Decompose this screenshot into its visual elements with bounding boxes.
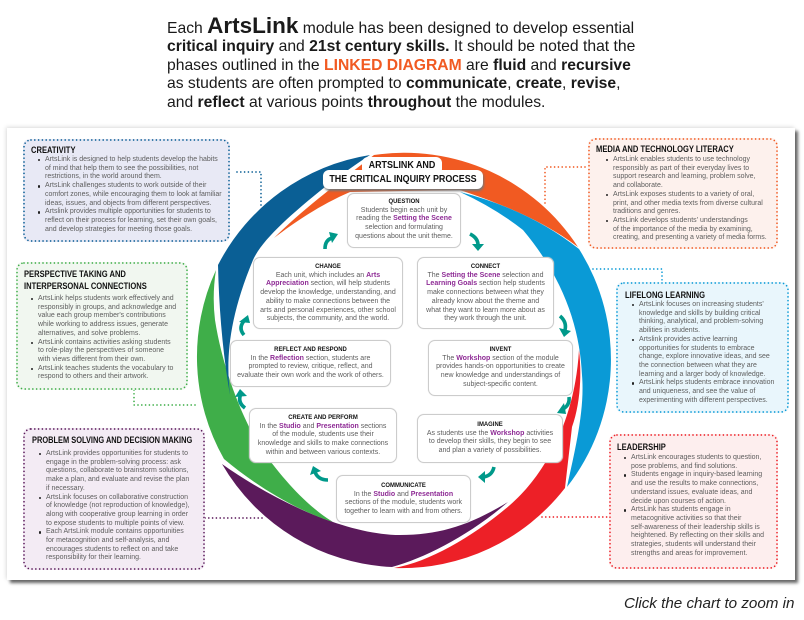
bullets: creativity: comfort zones, while encouraging them to look at familiar [45, 191, 222, 198]
bullets: perspective taking: ArtsLink contains activities asking students [38, 339, 171, 346]
bullets: leadership: self-awareness of their leadership skills is [631, 524, 760, 531]
bullets: perspective taking: to role-play the perspectives of someone [38, 347, 164, 354]
bullets: creativity: ArtsLink challenges students to work outside of their [45, 182, 206, 189]
step: invent: The Workshop section of the module [442, 355, 559, 362]
step: change: Each unit, which includes an Arts [276, 272, 380, 279]
step: question: Students begin each unit by [361, 207, 447, 214]
arrow: imagine to communicate [478, 467, 494, 483]
bullets: media literacy: ArtsLink enables students to use technology [613, 156, 750, 163]
panel: leadership [609, 434, 778, 569]
bullets: lifelong learning: abilities in students. [639, 327, 700, 334]
bullets: creativity: Artslink provides multiple opportunities for students to [45, 208, 211, 215]
bullets: leadership: Students engage in inquiry-based learning [631, 471, 762, 478]
step: question [347, 193, 461, 248]
heading: perspective taking: PERSPECTIVE TAKING AND [24, 269, 126, 280]
bullets: lifelong learning: experimenting with different perspectives. [639, 397, 768, 404]
title line one: ARTSLINK AND [369, 160, 435, 171]
bullets: creativity: and develop strategies for meeting those goals. [45, 226, 192, 233]
step: change: subjects, the community, and the world. [267, 315, 389, 322]
bullets: leadership [624, 454, 764, 557]
step: connect [417, 257, 554, 329]
connector: creativity [237, 172, 261, 205]
step: imagine: to develop their skills, they begin to see [429, 438, 551, 445]
bullets: lifelong learning: opportunities for students to embrace [639, 345, 755, 352]
arrow: create to reflect [235, 389, 247, 408]
bullets: problem solving [39, 450, 190, 561]
heading: creativity: CREATIVITY [31, 145, 75, 156]
bullets: perspective taking [31, 294, 176, 380]
title line two: THE CRITICAL INQUIRY PROCESS [329, 174, 477, 185]
step: change: CHANGE [315, 263, 341, 270]
bullets: leadership: strategies, students will understand their [631, 541, 756, 548]
bullets: problem solving: if necessary. [46, 485, 85, 492]
arrow: invent to imagine [557, 397, 569, 414]
connector: lifelong learning [593, 269, 662, 282]
step: invent: INVENT [490, 346, 511, 353]
bullets: leadership: metacognitive activities so that their [631, 515, 742, 522]
bullets: leadership: ArtsLink has students engage in [631, 506, 731, 513]
step: change: Appreciation section, will help students [266, 280, 390, 287]
bullets: lifelong learning: ArtsLink focuses on increasing students' [639, 301, 764, 308]
panel: creativity [23, 139, 230, 242]
step: connect: what they want to learn more about as [426, 307, 545, 314]
ring segment: red [394, 350, 580, 568]
bullets: problem solving: ArtsLink provides opportunities for students to [46, 450, 188, 457]
bullets: creativity: ideas, issues, and objects from different perspectives. [45, 200, 211, 207]
bullets: leadership: and use the results to make connections, [631, 480, 758, 487]
connector: perspective taking [134, 390, 197, 405]
bullets: media literacy: print, and other media texts from diverse cultural [613, 200, 763, 207]
ring segment: light blue [460, 192, 611, 487]
step: connect: make connections between what they [427, 289, 544, 296]
bullets: problem solving: engage in the problem-solving process: ask [46, 459, 181, 466]
bullets: media literacy: ArtsLink exposes students to a variety of oral, [613, 191, 754, 198]
step: create and perform [249, 408, 397, 463]
bullets: lifelong learning: ArtsLink helps students embrace innovation [639, 379, 774, 386]
text: critical inquiry and 21st century skills. It should be noted that the [167, 38, 635, 55]
arrow: connect to invent [559, 316, 571, 337]
step: change: ability to make connections between the [266, 298, 390, 305]
caption: Click the chart to zoom in [624, 595, 795, 612]
bullets: leadership: understand issues, evaluate ideas, and [631, 489, 752, 496]
bullets: leadership: pose problems, and find solutions. [631, 463, 737, 470]
title line two [323, 170, 483, 189]
arrow: reflect to change [239, 315, 250, 335]
ring segment: orange [274, 153, 578, 247]
bullets: problem solving: ArtsLink focuses on collaborative construction [46, 494, 188, 501]
bullets: leadership: strengths and areas for improvement. [631, 550, 747, 557]
bullets: perspective taking: respond to others and their artwork. [38, 373, 149, 380]
bullets: media literacy: and collaborate. [613, 182, 663, 189]
bullets: lifelong learning: thinking, analytical, and problem-solving [639, 318, 763, 325]
bullets: creativity: reflect on their process for learning, set their own goals, [45, 217, 217, 224]
step: create and perform: of the module, students use their [272, 431, 374, 438]
bullets: media literacy: responsibly as part of their everyday lives to [613, 165, 749, 172]
step: create and perform: In the Studio and Presentation sections [260, 423, 386, 430]
bullets: creativity: of mind that help them to see the possibilities, not [45, 165, 198, 172]
step: connect: CONNECT [471, 263, 500, 270]
step: communicate: sections of the module, students work [345, 499, 462, 506]
text: phases outlined in the LINKED DIAGRAM are fluid and recursive [167, 57, 631, 74]
step: question: reading the Setting the Scene [356, 215, 452, 222]
step: create and perform: knowledge and skills to make connections [258, 440, 388, 447]
step: imagine: IMAGINE [477, 421, 503, 428]
step: reflect and respond: REFLECT AND RESPOND [274, 346, 347, 353]
text: as students are often prompted to communicate, create, revise, [167, 75, 620, 92]
step: connect: they work through the unit. [444, 315, 527, 322]
bullets: problem solving: Each ArtsLink module contains opportunities [46, 528, 184, 535]
bullets: lifelong learning: knowledge and skills by building critical [639, 310, 760, 317]
step: communicate [336, 475, 471, 523]
bullets: problem solving: encourages students to reflect on and take [46, 546, 178, 553]
intro text [167, 13, 635, 111]
step: reflect and respond: In the Reflection section, students are [251, 355, 370, 362]
panel: media and technology literacy [588, 138, 778, 249]
step: communicate: In the Studio and Presentation [354, 491, 453, 498]
bullets: problem solving: along with cooperative group learning in order [46, 511, 188, 518]
panel: problem solving and decision making [23, 428, 205, 570]
heading: media literacy: MEDIA AND TECHNOLOGY LITERACY [596, 144, 734, 155]
bullets: problem solving: of knowledge (not reproduction of knowledge), [46, 502, 190, 509]
heading: perspective taking [24, 269, 147, 292]
step: imagine: and plan a variety of possibilities. [439, 447, 541, 454]
step: communicate: together to learn with and from others. [344, 508, 463, 515]
bullets: media literacy [606, 156, 767, 241]
heading: problem solving: PROBLEM SOLVING AND DECISION MAKING [32, 435, 192, 446]
bullets: perspective taking: while working to address issues, generate [38, 321, 168, 328]
heading: lifelong learning: LIFELONG LEARNING [625, 290, 705, 301]
ring segment: purple [222, 464, 508, 567]
bullets: lifelong learning: learning and a larger body of knowledge. [639, 371, 765, 378]
step: imagine: As students use the Workshop activities [427, 430, 553, 437]
step: change: arts and personal experiences, other school [260, 307, 396, 314]
step: change: develop the knowledge, understanding, and [260, 289, 396, 296]
bullets: lifelong learning: Artslink provides active learning [639, 336, 737, 343]
bullets: lifelong learning [632, 300, 774, 404]
heading: perspective taking: INTERPERSONAL CONNECTIONS [24, 281, 147, 292]
bullets: problem solving: to expose students to multiple points of view. [46, 520, 185, 527]
step: reflect and respond [230, 340, 391, 387]
heading: leadership: LEADERSHIP [617, 442, 666, 453]
bullets: media literacy: ArtsLink develops students' understandings [613, 217, 748, 224]
step: question: QUESTION [389, 198, 419, 205]
arrow: question to connect [470, 234, 484, 251]
bullets: lifelong learning: change, explore innovative ideas, and see [639, 353, 770, 360]
bullets: media literacy: of the importance of the media by examining, [613, 226, 753, 233]
step: connect: Learning Goals section help students [426, 280, 545, 287]
panel: perspective taking and interpersonal connections [16, 262, 188, 390]
step: imagine [417, 414, 563, 463]
step: invent: provides hands-on opportunities to create [436, 363, 565, 370]
step: invent [428, 340, 573, 396]
step: reflect and respond: prompted to review, critique, reflect, and [248, 363, 373, 370]
step: communicate: COMMUNICATE [381, 482, 426, 489]
step: invent: subject-specific content. [463, 381, 538, 388]
bullets: perspective taking: responsibly in groups, and acknowledge and [38, 304, 176, 311]
bullets: creativity: restrictions, in the world around them. [45, 173, 162, 180]
text: Each ArtsLink module has been designed to develop essential [167, 13, 634, 38]
title line one [362, 157, 442, 175]
bullets: problem solving: make a plan, and evaluate and revise the plan [46, 476, 189, 483]
step: question: questions about the unit theme. [355, 233, 453, 240]
chart sheet [7, 128, 795, 580]
bullets: problem solving: responsibility for their learning. [46, 554, 141, 561]
connector: problem solving [205, 517, 265, 519]
ring segment: green [197, 270, 333, 522]
step: question: selection and formulating [365, 224, 443, 231]
panel: lifelong learning [616, 282, 789, 413]
bullets: perspective taking: alternatives, and solve problems. [38, 330, 140, 337]
step: change [253, 257, 403, 329]
bullets: media literacy: support research and learning, problem solve, [613, 173, 755, 180]
bullets: problem solving: questions, collaborate to brainstorm solutions, [46, 467, 188, 474]
bullets: perspective taking: ArtsLink helps students work effectively and [38, 295, 174, 302]
arrow: change to question [325, 232, 338, 249]
bullets: problem solving: for metacognition and self-analysis, and [46, 537, 169, 544]
bullets: media literacy: traditions and genres. [613, 208, 680, 215]
bullets: lifelong learning: the connection between what they are [639, 362, 757, 369]
bullets: perspective taking: value each group member's contributions [38, 312, 166, 319]
step: connect: already know about the theme and [432, 298, 539, 305]
bullets: media literacy: creating, and presenting a variety of media forms. [613, 234, 767, 241]
step: invent: new knowledge and understandings of [441, 372, 560, 379]
bullets: perspective taking: with views different from their own. [38, 356, 145, 363]
arrow: communicate to create [310, 466, 328, 480]
connector: media literacy [545, 167, 588, 203]
bullets: leadership: heightened. By reflecting on their skills and [631, 532, 764, 539]
connector: leadership [542, 516, 609, 518]
step: reflect and respond: evaluate their own work and the work of others. [237, 372, 384, 379]
step: create and perform: CREATE AND PERFORM [288, 414, 358, 421]
bullets: creativity: ArtsLink is designed to help students develop the habits [45, 156, 218, 163]
step: create and perform: within and between various contexts. [266, 449, 380, 456]
diagram title [322, 157, 486, 192]
step: connect: The Setting the Scene selection and [428, 272, 543, 279]
bullets: lifelong learning: and uniqueness, and see the value of [639, 388, 755, 395]
text: and reflect at various points throughout the modules. [167, 94, 545, 111]
bullets: leadership: decide upon courses of action. [631, 498, 726, 505]
bullets: leadership: ArtsLink encourages students to question, [631, 454, 761, 461]
bullets: perspective taking: ArtsLink teaches students the vocabulary to [38, 365, 173, 372]
bullets: creativity [38, 156, 222, 233]
ring segment: dark blue [218, 155, 370, 395]
